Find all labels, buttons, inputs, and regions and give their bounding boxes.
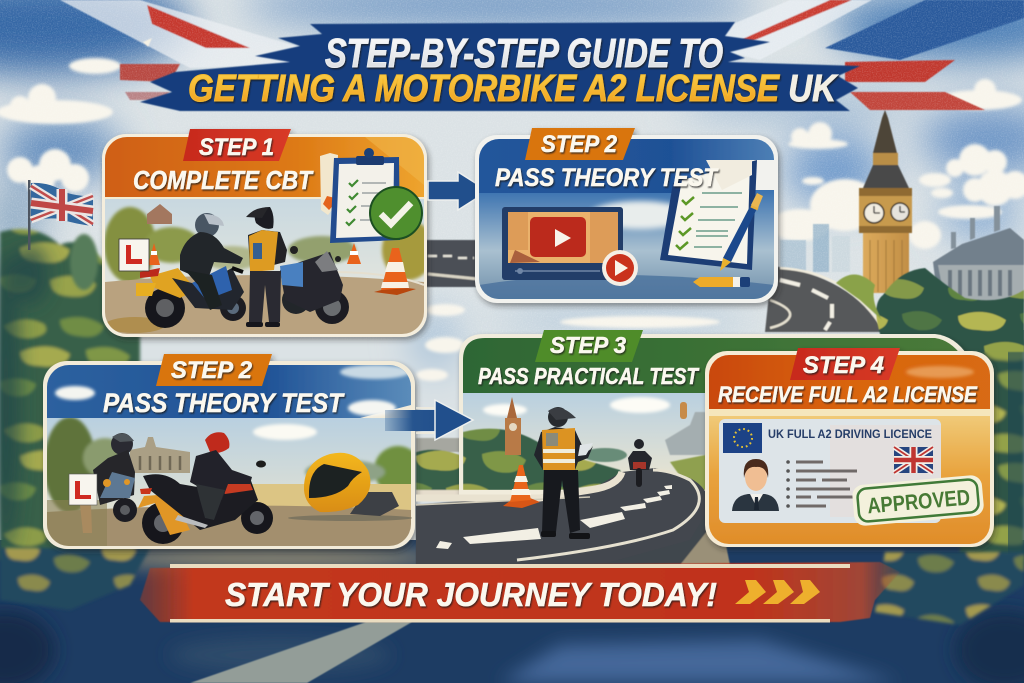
ribbon: step 2: STEP 2: [541, 131, 618, 158]
panel: step 4 receive full A2 license: [705, 348, 994, 547]
icon: second motorbike: [280, 246, 349, 324]
road: practical test road with markings: [416, 468, 709, 565]
icon: clock tower: [505, 397, 521, 455]
icon: distant building: [130, 437, 190, 473]
card data lines: [796, 462, 857, 506]
header band: [709, 355, 990, 409]
scene backdrop: [479, 190, 775, 300]
panel: step 1 complete CBT: [102, 129, 434, 338]
cta top and bottom edges: [170, 564, 850, 622]
title line 1: STEP-BY-STEP GUIDE TO: [325, 30, 723, 76]
cta ribbon: [140, 562, 900, 622]
heading: pass practical test: PASS PRACTICAL TEST: [478, 363, 700, 389]
card title: UK FULL A2 DRIVING LICENCE: [768, 427, 932, 441]
icon: rider in red helmet: [190, 432, 266, 520]
ribbon: step 2: STEP 2: [171, 357, 253, 384]
stamp: approved: [852, 474, 985, 527]
icon: examiner in hi-vis vest: [534, 407, 593, 539]
icon: instructor in hi-vis vest: [246, 207, 287, 327]
icon: traffic cone on road: [503, 465, 540, 508]
icon: traffic cone: [374, 248, 416, 295]
card bullets: [786, 462, 790, 506]
scene backdrop: [463, 393, 705, 473]
icon: L plate: [119, 239, 149, 271]
icon: green approval tick: [370, 187, 422, 239]
icon: motorbike with learner: [136, 266, 246, 328]
ribbon: step 1: STEP 1: [199, 134, 274, 161]
grain overlay over sky: [0, 0, 1024, 340]
header band: [463, 338, 968, 393]
stamp: approved: APPROVED: [866, 485, 971, 518]
icon: L sign on post: [69, 474, 97, 533]
arrow: step 1 to step 2: [428, 172, 488, 210]
icon: union flag on pole: [28, 180, 93, 250]
background: foliage in gap between lower panels: [416, 438, 460, 498]
icon: blue pen: [720, 193, 763, 271]
icon: distant motorcyclist: [628, 439, 652, 487]
cta text: START YOUR JOURNEY TODAY!: [225, 576, 717, 613]
panel: step 2 pass theory test (top): [475, 128, 778, 303]
icon: rolled scroll: [320, 153, 340, 215]
ribbon: step 2: [156, 354, 272, 386]
background: union flag sweep at the top: [60, 0, 1024, 110]
scene backdrop: [105, 199, 424, 282]
ribbon: step 2: [525, 128, 635, 160]
ribbon: step 3: [535, 330, 643, 362]
background: left foliage: [0, 229, 140, 560]
road: lower road surface: [416, 470, 730, 565]
title line 2: GETTING A MOTORBIKE A2 LICENSE UK: [188, 68, 838, 110]
icon: ID portrait: [732, 459, 779, 511]
icon: test paper clipboard: [660, 160, 757, 270]
background: bottom-left olive speckle: [0, 548, 150, 610]
icon: EU flag: [723, 423, 762, 453]
scene backdrop: [709, 408, 990, 544]
heading: pass theory test: PASS THEORY TEST: [495, 164, 719, 192]
background: bottom navy road area: [0, 540, 1024, 683]
background: clouds: [0, 58, 1024, 381]
panel: step 2 pass theory test (bottom): [43, 354, 422, 549]
icon: chevrons: [735, 580, 820, 604]
labels: step 3 header: [478, 330, 700, 389]
ribbon: step 1: [183, 129, 291, 161]
arrow: step 2 to step 3: [385, 400, 473, 440]
foliage: clump in front of tower and building: [836, 268, 1024, 352]
header band: [479, 139, 775, 193]
icon: clipboard with checklist: [330, 148, 400, 243]
label: step 3: STEP 3: [550, 332, 626, 358]
header band: [105, 137, 425, 198]
heading: complete CBT: COMPLETE CBT: [133, 165, 314, 195]
ribbon: step 4: STEP 4: [803, 352, 884, 379]
background: distant skyline: [780, 224, 850, 272]
icon: pencil: [693, 277, 750, 287]
road: upper winding road: [425, 240, 885, 332]
scene backdrop: [47, 418, 411, 509]
icon: rider on bike: [180, 213, 243, 310]
icon: motorbike with rider: [138, 474, 273, 544]
licence card: [719, 419, 941, 523]
heading: pass theory test: PASS THEORY TEST: [103, 388, 345, 418]
icon: palace building: [933, 206, 1024, 302]
icon: scooter rider: [93, 433, 137, 522]
background: right foliage: [960, 330, 1024, 565]
icon: round play button: [602, 250, 638, 286]
panel: step 3 pass practical test: [459, 334, 968, 495]
icon: Big Ben clock tower: [859, 110, 912, 293]
header band: [47, 365, 411, 418]
banner: title: [140, 22, 860, 111]
icon: union flag: [894, 447, 933, 473]
icon: video tablet: [502, 207, 623, 280]
background: bottom-right olive speckle: [875, 552, 1024, 625]
banner: call to action: [140, 562, 900, 622]
heading: receive full A2 license: RECEIVE FULL A2 LICENSE: [718, 382, 978, 407]
icon: small cones: [148, 243, 361, 265]
title brush banner: [140, 22, 860, 111]
ribbon: step 4: [790, 348, 900, 380]
icon: yellow helmet on the ground: [288, 453, 412, 521]
